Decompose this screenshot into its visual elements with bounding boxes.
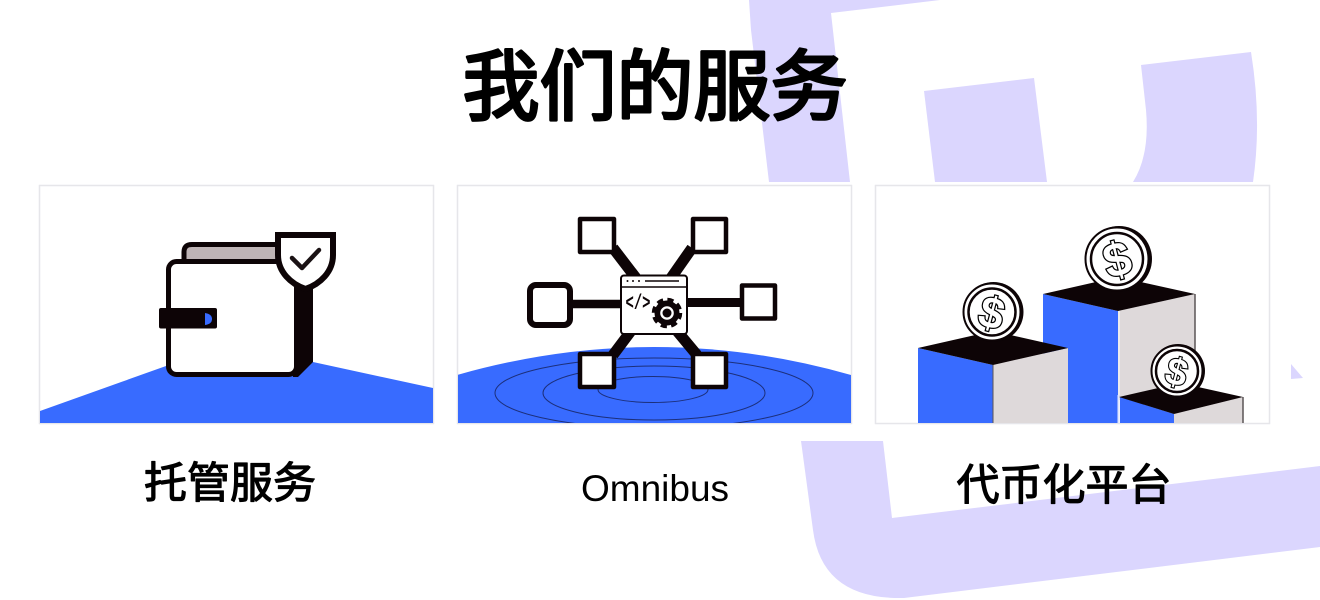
title: 我们的服务	[462, 45, 848, 131]
block: small right	[1118, 383, 1243, 423]
background: square block	[924, 78, 1047, 182]
panel: omnibus	[457, 186, 852, 428]
background: small triangle	[1291, 364, 1303, 379]
background: top left arm	[749, 0, 940, 182]
coin: top	[1086, 226, 1152, 292]
coin: right: $	[1161, 350, 1192, 396]
background: purple logo shape	[749, 0, 1320, 598]
icon: wallet	[159, 244, 313, 377]
gear icon	[654, 300, 680, 326]
clasp button	[205, 313, 212, 325]
block: left	[918, 331, 1068, 423]
code window	[621, 276, 687, 334]
coin: right	[1151, 344, 1205, 398]
panel: custody	[40, 186, 434, 424]
background: right arm	[1133, 52, 1257, 182]
blue disc with ripples	[457, 347, 851, 428]
code glyph: </>	[626, 293, 650, 316]
wallet clasp	[159, 308, 217, 328]
background: bottom arm	[801, 441, 1320, 598]
wallet body	[168, 262, 296, 374]
coin: left: $	[973, 287, 1010, 340]
panel: tokenization	[876, 186, 1270, 424]
icon: shield with check	[278, 235, 333, 289]
connectors	[573, 248, 740, 355]
block: tall middle	[1043, 277, 1195, 423]
wallet back card	[184, 244, 280, 262]
coin: left	[964, 282, 1024, 342]
wallet side	[293, 285, 313, 377]
coin: top: $	[1098, 231, 1137, 290]
label: custody: 托管服务	[144, 460, 316, 508]
label: omnibus: Omnibus	[581, 468, 729, 509]
node squares	[530, 219, 775, 387]
blue ground	[40, 362, 433, 423]
label: tokenization platform: 代币化平台	[956, 462, 1172, 510]
